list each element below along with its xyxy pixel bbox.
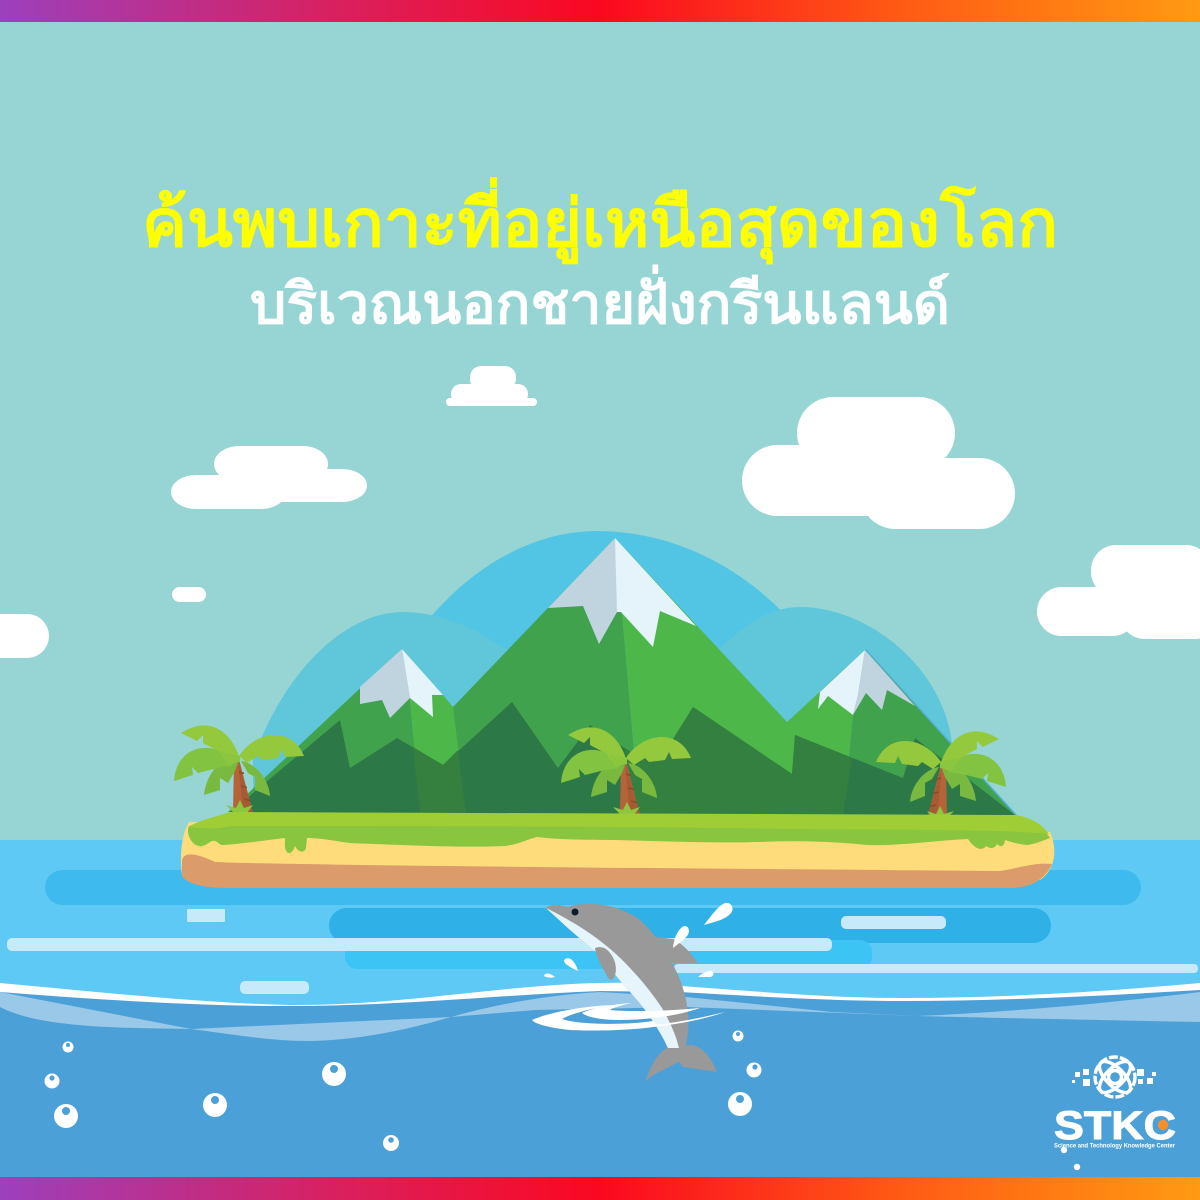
belly — [546, 908, 679, 1048]
top gradient bar — [0, 0, 1200, 22]
wave highlight — [0, 992, 1200, 1041]
left mountain — [228, 649, 466, 812]
dark foreground hills — [228, 702, 1015, 820]
tail — [645, 1045, 717, 1082]
logo pixels — [1072, 1069, 1156, 1086]
deep water — [0, 990, 1200, 1177]
left mountain dome — [253, 612, 510, 800]
body — [546, 904, 688, 1050]
water ripples — [532, 1003, 725, 1031]
icon: atom — [1094, 1056, 1136, 1098]
dark grass — [188, 815, 1050, 853]
back mountain dome — [420, 531, 790, 760]
eye — [572, 908, 578, 916]
water bands — [7, 870, 1198, 994]
palm tree right — [876, 731, 1006, 819]
palm tree left — [174, 725, 304, 813]
palm tree centre — [561, 727, 691, 815]
right mountain — [787, 649, 1017, 815]
cloud: left — [171, 446, 367, 509]
main mountain — [300, 538, 900, 820]
cloud: large right — [742, 397, 1015, 529]
title: ค้นพบเกาะที่อยู่เหนือสุดของโลก — [142, 176, 1058, 265]
soil base — [182, 854, 1052, 888]
dolphin — [546, 904, 717, 1082]
cloud: small top — [446, 366, 537, 406]
bottom gradient bar — [0, 1177, 1200, 1200]
bubbles — [44, 1030, 1080, 1170]
logo wordmark: STKC — [1054, 1104, 1176, 1148]
wave crest white — [0, 983, 1200, 1010]
water splash drops — [544, 903, 733, 978]
light grass — [188, 812, 1049, 834]
island — [181, 812, 1054, 888]
logo orange dot — [1158, 1120, 1168, 1130]
right mountain dome — [718, 607, 952, 800]
cloud: left edge — [0, 614, 49, 658]
cloud: far right — [1037, 545, 1200, 639]
sand — [181, 822, 1054, 880]
logo: STKC — [1054, 1056, 1176, 1150]
dorsal fin — [655, 937, 698, 963]
pectoral fin — [595, 947, 616, 980]
ocean — [0, 840, 1200, 1180]
subtitle: บริเวณนอกชายฝั่งกรีนแลนด์ — [250, 264, 950, 335]
cloud: small pill — [172, 587, 206, 602]
logo tagline: Science and Technology Knowledge Center — [1054, 1144, 1176, 1150]
